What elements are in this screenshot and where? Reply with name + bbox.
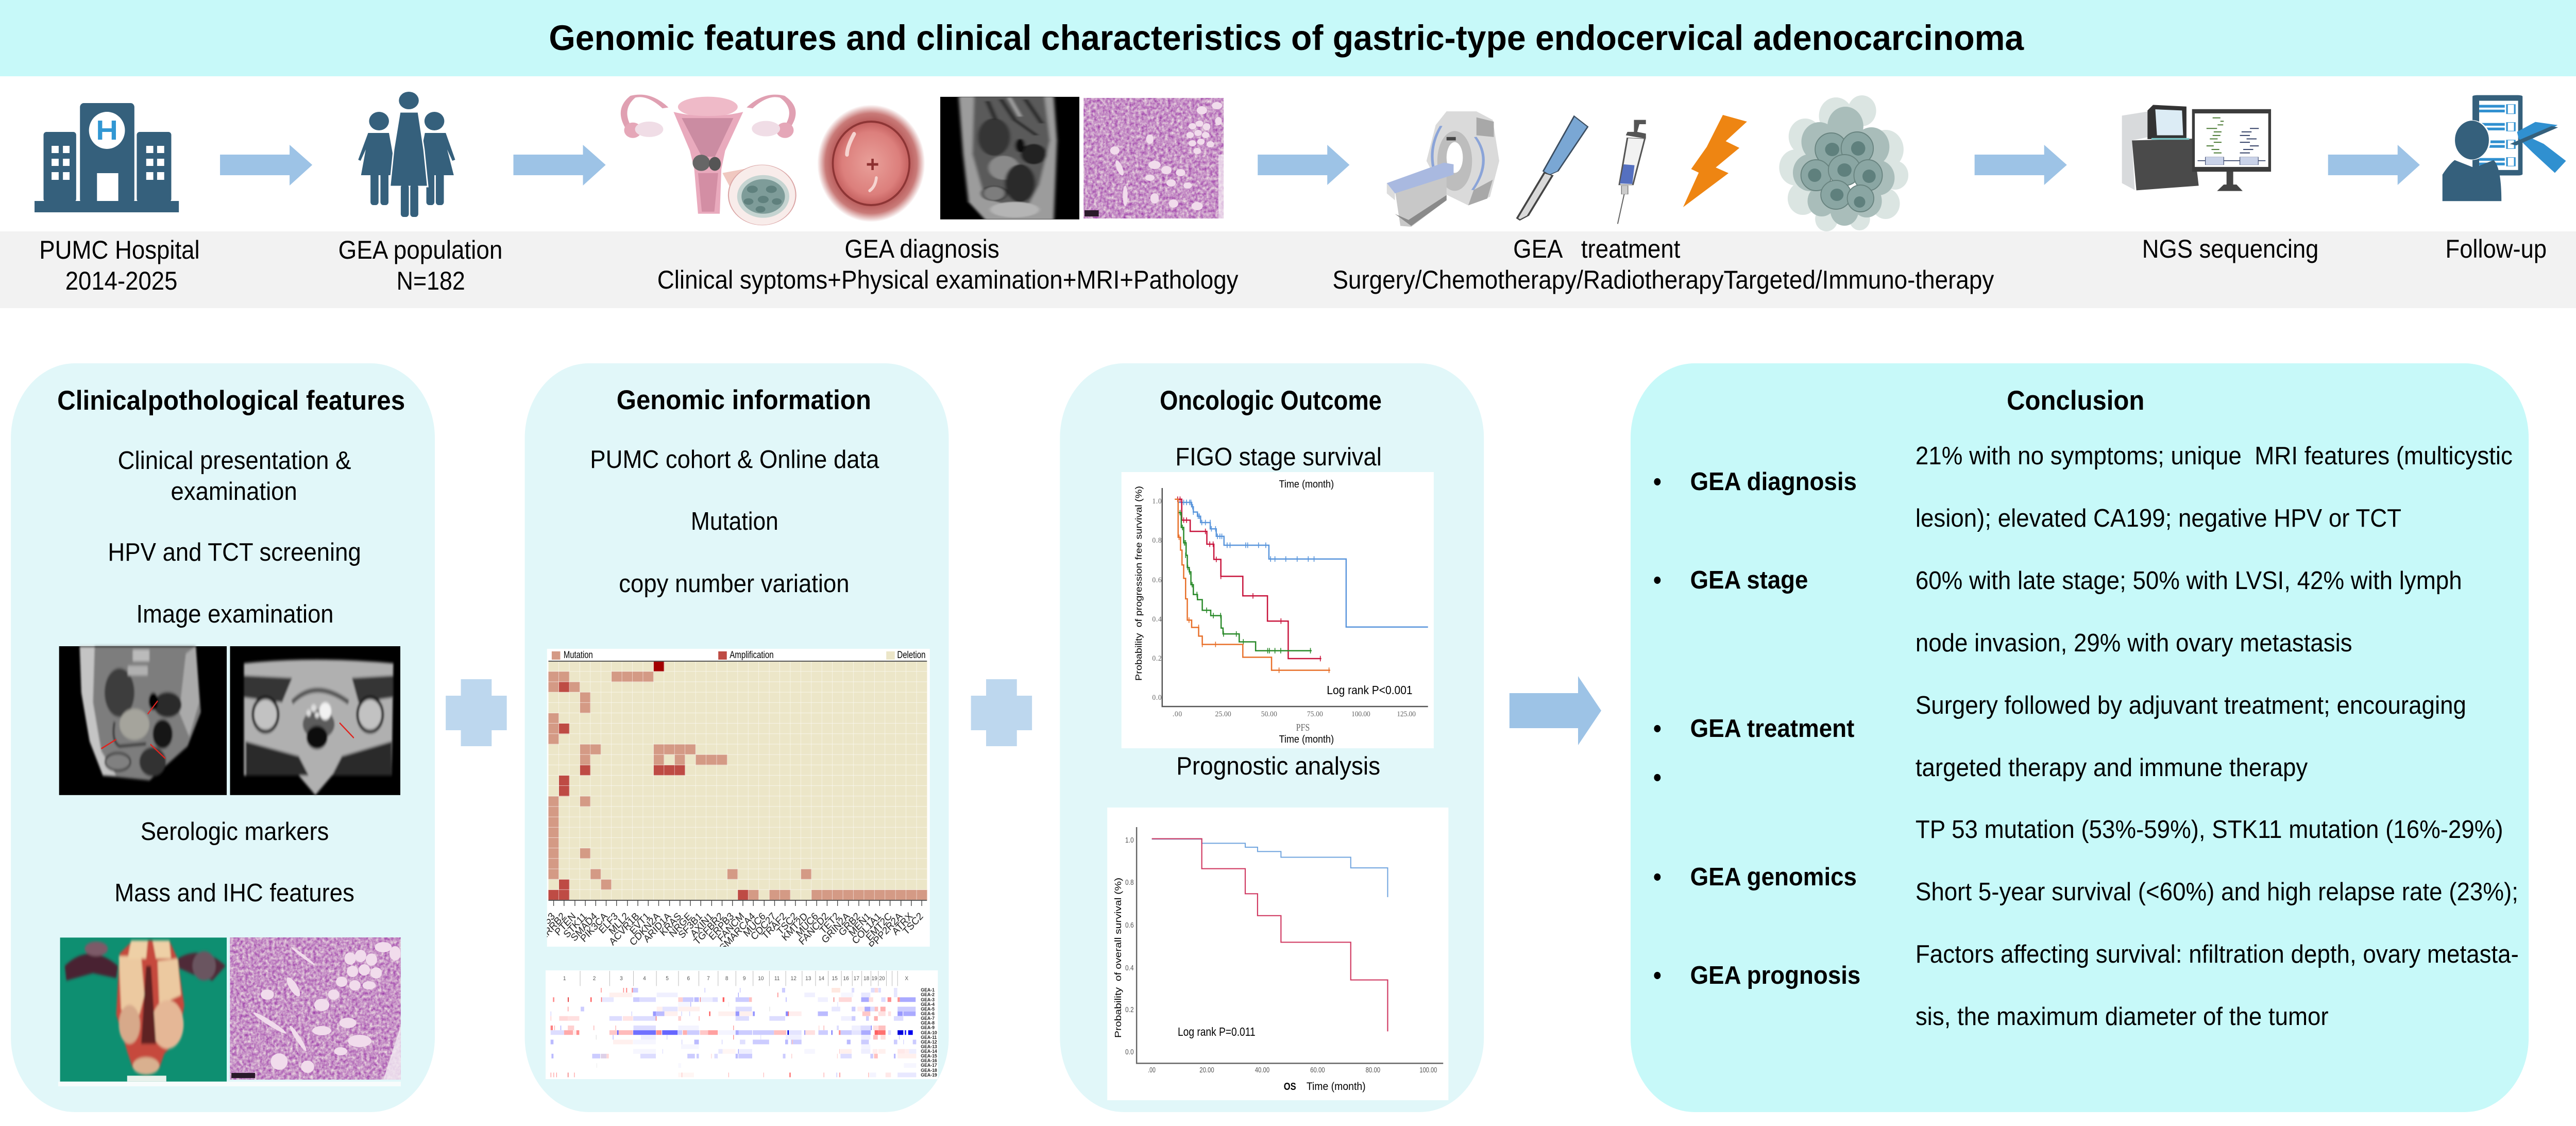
chromosome labels: 1 (563, 976, 566, 982)
chromosome labels (563, 976, 908, 982)
chromosome labels: 16 (843, 976, 849, 982)
heading: Conclusion: Conclusion (2007, 385, 2144, 415)
chromosome labels: X (905, 976, 908, 982)
gene labels: CDKN2A (628, 911, 663, 948)
axis labels and tick values: 0.6 (1152, 576, 1162, 584)
gene labels: AXIN1 (689, 911, 715, 940)
chromosome labels: 7 (707, 976, 710, 982)
axis labels and tick values: 125.00 (1397, 710, 1416, 718)
chromosome labels: 5 (666, 976, 669, 982)
text: FIGO stage survival: FIGO stage survival (1175, 442, 1382, 470)
heading: Genomic information: Genomic information (617, 384, 871, 415)
sample labels: GEA-3 (921, 997, 935, 1002)
image: gross specimen photograph (60, 937, 227, 1082)
sample labels (921, 987, 938, 1078)
gene labels: SMAD4 (569, 911, 600, 944)
axis labels and tick values: Time (month) (1279, 734, 1334, 745)
arrow: diagnosis to treatment (1258, 145, 1349, 185)
icon: tumour cell cluster (1779, 95, 1908, 231)
text: HPV and TCT screening: HPV and TCT screening (108, 537, 361, 566)
chromosome labels: 11 (774, 976, 779, 982)
gene labels: MLL2 (607, 911, 631, 937)
gene labels: NRGE (667, 911, 694, 940)
sample labels: GEA-7 (921, 1016, 935, 1021)
panel: clinicopathological features (11, 363, 435, 1112)
icon: cervix (817, 105, 925, 222)
caption: GEA treatment: Surgery/Chemotherapy/RadiotherapyTargeted/Immuno-therapy (1332, 266, 1994, 294)
text: prognosis findings (1916, 877, 2519, 1030)
sample labels: GEA-8 (921, 1020, 935, 1026)
chart: overall survival (1107, 808, 1448, 1100)
gene labels: KMT2D (780, 911, 810, 944)
title banner (0, 0, 2576, 76)
sample labels: GEA-15 (921, 1053, 937, 1058)
bullet list: conclusion topics: GEA diagnosis (1690, 467, 1857, 495)
chromosome labels: 20 (879, 976, 885, 982)
gene labels: CDC27 (749, 911, 778, 943)
arrow: population to diagnosis (514, 145, 606, 186)
axis labels and tick values: 0.4 (1125, 964, 1134, 972)
image: sagittal MRI with arrows (59, 646, 227, 795)
gene labels: ACVR1B (607, 911, 641, 948)
gene labels: ERRB2 (538, 911, 568, 943)
gene labels: ATRX (890, 911, 915, 937)
sample labels: GEA-13 (921, 1044, 937, 1049)
text: diagnosis findings: lesion); elevated CA199; negative HPV or TCT (1916, 503, 2401, 532)
axis labels and tick values: 1.0 (1152, 497, 1162, 506)
icon: MRI scanner (1387, 111, 1499, 227)
sample labels: GEA-10 (921, 1030, 937, 1035)
text: clinical presentation: Clinical presentation & (118, 446, 351, 474)
text: diagnosis findings (1916, 441, 2513, 532)
axis labels and tick values: 50.00 (1261, 710, 1277, 718)
axis labels and tick values: 1.0 (1125, 836, 1134, 845)
text: Mutation: Mutation (691, 507, 778, 535)
caption: GEA diagnosis: Clinical syptoms+Physical examination+MRI+Pathology (657, 266, 1239, 294)
legend: mutation types: Mutation (564, 649, 593, 660)
chromosome labels: 4 (643, 976, 646, 982)
axis labels and tick values (1113, 836, 1437, 1093)
axis labels and tick values: 0.2 (1152, 654, 1162, 663)
chromosome labels: 2 (593, 976, 596, 982)
panel: genomic information (525, 363, 948, 1112)
chromosome labels: 14 (819, 976, 824, 982)
bullet list: conclusion topics: • (1653, 714, 1662, 742)
sample labels: GEA-12 (921, 1039, 937, 1045)
panel: conclusion (1631, 363, 2529, 1112)
chart: copy number variation heatmap (546, 970, 938, 1079)
gene labels: KRAS (658, 911, 684, 938)
text: genomic findings: TP 53 mutation (53%-59%), STK11 mutation (16%-29%) (1916, 815, 2503, 843)
chromosome labels: 9 (743, 976, 746, 982)
sample labels: GEA-1 (921, 987, 935, 993)
sample labels: GEA-19 (921, 1072, 937, 1078)
gene labels: TSC2 (775, 911, 800, 937)
text: treatment findings: Surgery followed by adjuvant treatment; encouraging (1916, 691, 2466, 719)
text: Prognostic analysis: Prognostic analysis (1176, 751, 1380, 780)
axis labels and tick values: 0.0 (1152, 694, 1162, 702)
gene labels: FANCM (716, 911, 747, 944)
sample labels: GEA-6 (921, 1011, 935, 1016)
axis labels and tick values: 0.8 (1152, 536, 1162, 545)
image: sagittal MRI (940, 97, 1079, 220)
annotation: log rank p value: Log rank P<0.001 (1327, 683, 1413, 697)
panel: oncologic outcome (1060, 363, 1484, 1112)
chromosome labels: 10 (758, 976, 764, 982)
chromosome labels: 17 (854, 976, 859, 982)
gene labels: TP53 (534, 911, 557, 936)
caption: GEA diagnosis (657, 235, 1239, 294)
gene labels: MUC6 (741, 911, 768, 939)
caption: GEA treatment (1332, 235, 1994, 294)
axis labels and tick values: Time (month) (1279, 479, 1334, 490)
icon: hospital (35, 103, 179, 212)
text: diagnosis findings: 21% with no symptoms; unique MRI features (multicystic (1916, 441, 2513, 469)
icon: lightning bolt (1683, 115, 1747, 207)
chromosome labels: 15 (832, 976, 838, 982)
caption: PUMC Hospital: PUMC Hospital (39, 236, 200, 264)
axis labels and tick values: 0.0 (1125, 1048, 1134, 1056)
gene labels: FANCD2 (797, 911, 831, 947)
axis labels and tick values: 0.8 (1125, 879, 1134, 887)
arrow: treatment to sequencing (1975, 145, 2067, 185)
axis labels and tick values: .00 (1148, 1066, 1156, 1074)
chromosome labels: 12 (791, 976, 796, 982)
arrow: hospital to population (220, 145, 312, 186)
image: histology top (1083, 98, 1224, 219)
sample labels: GEA-9 (921, 1025, 935, 1030)
chromosome labels: 18 (863, 976, 869, 982)
heading: Clinicalpothological features: Clinicalpothological features (57, 385, 405, 415)
text: stage findings (1916, 566, 2462, 657)
heading: Oncologic Outcome: Oncologic Outcome (1160, 385, 1382, 415)
gene labels: ELF3 (597, 911, 620, 936)
image: histology IHC (230, 937, 401, 1080)
gene labels: TRAF2 (760, 911, 789, 942)
sample labels: GEA-4 (921, 1002, 935, 1007)
sample labels: GEA-14 (921, 1049, 938, 1054)
axis labels and tick values: Probability of progression free survival (%) (1133, 486, 1144, 681)
text: copy number variation: copy number variation (619, 569, 850, 597)
sample labels: GEA-11 (921, 1035, 937, 1040)
gene labels: ARID1A (642, 911, 673, 945)
caption: GEA population (338, 236, 502, 295)
gene labels (547, 912, 923, 947)
bullet list: conclusion topics: • (1653, 862, 1662, 890)
text: prognosis findings: Short 5-year survival (<60%) and high relapse rate (23%); (1916, 877, 2518, 905)
chart: progression free survival by FIGO stage (1122, 472, 1434, 748)
axis labels and tick values: 60.00 (1310, 1066, 1325, 1074)
bullet list: conclusion topics: GEA stage (1690, 565, 1808, 594)
text: treatment findings (1916, 691, 2466, 781)
bullet list: conclusion topics: • (1653, 961, 1662, 989)
gene labels: EVT1 (628, 911, 652, 937)
text: prognosis findings: Factors affecting survival: nfiltration depth, ovary metasta- (1916, 939, 2519, 968)
icon: group of women (358, 92, 455, 217)
gene labels: TGFBR2 (692, 911, 726, 947)
axis labels and tick values: 20.00 (1199, 1066, 1214, 1074)
axis labels and tick values (1133, 479, 1416, 745)
gene labels: COL1A1 (850, 911, 883, 947)
chromosome labels: 3 (620, 976, 623, 982)
text: prognosis findings: sis, the maximum diameter of the tumor (1916, 1002, 2329, 1030)
sample labels: GEA-2 (921, 992, 935, 997)
chromosome labels: 19 (872, 976, 877, 982)
caption: NGS sequencing: NGS sequencing (2142, 235, 2318, 263)
axis labels and tick values: .00 (1173, 710, 1182, 718)
bullet list: conclusion topics: • (1653, 565, 1662, 594)
axis labels and tick values: 0.2 (1125, 1006, 1134, 1014)
gene labels: STK11 (562, 911, 589, 940)
gene labels: ERPB3 (707, 911, 736, 943)
axis labels and tick values: 25.00 (1215, 710, 1231, 718)
axis labels and tick values: 0.6 (1125, 921, 1134, 930)
icon: syringe (1618, 120, 1646, 224)
axis labels and tick values: 0.4 (1152, 615, 1162, 624)
caption: GEA population: N=182 (397, 267, 465, 295)
bullet list: conclusion topics: • (1653, 467, 1662, 495)
arrow: outcome to conclusion (1510, 676, 1601, 745)
gene labels: SF3B1 (676, 911, 704, 941)
title: Genomic features and clinical characteristics of gastric-type endocervical adenocarcinoma (549, 19, 2024, 58)
caption: GEA treatment: GEA treatment (1513, 235, 1680, 263)
icon: scalpel (1517, 116, 1588, 220)
legend: mutation types: Deletion (897, 649, 925, 660)
text: treatment findings: targeted therapy and immune therapy (1916, 753, 2308, 781)
plus sign between genomic and outcome panels (971, 679, 1032, 746)
annotation: log rank p value: Log rank P=0.011 (1178, 1025, 1256, 1038)
gene labels: PTEN (553, 911, 578, 938)
bullet list: conclusion topics (1653, 467, 1860, 989)
caption: Follow-up: Follow-up (2446, 235, 2547, 263)
text: clinical presentation (118, 446, 351, 505)
icon: uterus with tumour inset (624, 96, 796, 225)
axis labels and tick values: 75.00 (1307, 710, 1323, 718)
chromosome labels: 6 (687, 976, 690, 982)
icon: follow-up person with checklist (2443, 95, 2566, 201)
axis labels and tick values: Time (month) (1307, 1081, 1366, 1093)
bullet list: conclusion topics: GEA genomics (1690, 862, 1857, 890)
chromosome labels: 8 (725, 976, 728, 982)
bullet list: conclusion topics: GEA prognosis (1690, 961, 1860, 989)
caption: PUMC Hospital: 2014-2025 (65, 267, 177, 295)
gene labels: SMARCA4 (718, 911, 757, 954)
text: stage findings: node invasion, 29% with ovary metastasis (1916, 628, 2352, 657)
gene labels: TSC2 (901, 911, 925, 937)
sample labels: GEA-5 (921, 1006, 935, 1012)
caption band (0, 231, 2576, 308)
caption: GEA population: GEA population (338, 236, 502, 264)
text: stage findings: 60% with late stage; 50% with LVSI, 42% with lymph (1916, 566, 2462, 594)
image: axial MRI with arrow (230, 646, 400, 795)
gene labels: PPP2R2A (867, 911, 905, 951)
gene labels: GRIN2A (820, 911, 852, 946)
axis labels and tick values: 80.00 (1366, 1066, 1380, 1074)
icon: NGS sequencer and monitor (2122, 105, 2271, 191)
gene labels: TET2 (818, 911, 842, 936)
sample labels: GEA-17 (921, 1063, 937, 1068)
caption: GEA diagnosis: GEA diagnosis (844, 235, 999, 263)
sample labels: GEA-16 (921, 1058, 937, 1063)
bullet list: conclusion topics: • (1653, 763, 1662, 791)
chromosome labels: 13 (805, 976, 811, 982)
gene labels: PIK3CA (579, 911, 610, 945)
text: Mass and IHC features: Mass and IHC features (114, 878, 354, 906)
gene labels: MEN1 (847, 911, 873, 939)
sample labels: GEA-18 (921, 1068, 937, 1073)
axis labels and tick values: 40.00 (1255, 1066, 1269, 1074)
legend: mutation types: Amplification (730, 649, 774, 660)
axis labels and tick values: 100.00 (1419, 1066, 1437, 1074)
axis labels and tick values: PFS (1296, 722, 1310, 733)
legend: mutation types (552, 649, 925, 660)
caption: PUMC Hospital (39, 236, 200, 295)
axis labels and tick values: OS (1284, 1081, 1296, 1093)
gene labels: EMT2C (864, 911, 894, 944)
axis labels and tick values: 100.00 (1351, 710, 1370, 718)
gene labels: GRB2 (837, 911, 862, 938)
arrow: sequencing to follow-up (2328, 145, 2420, 185)
axis labels and tick values: Probability of overall survival (%) (1113, 878, 1123, 1038)
plus sign between clinical and genomic panels (446, 679, 507, 746)
bullet list: conclusion topics: GEA treatment (1690, 714, 1855, 742)
text: clinical presentation: examination (171, 477, 297, 505)
chart: mutation heatmap (534, 649, 930, 954)
text: Serologic markers: Serologic markers (141, 817, 329, 845)
text: PUMC cohort and online data: PUMC cohort & Online data (590, 445, 879, 473)
gene labels: MUC6 (794, 911, 820, 939)
text: Image examination: Image examination (137, 599, 334, 628)
